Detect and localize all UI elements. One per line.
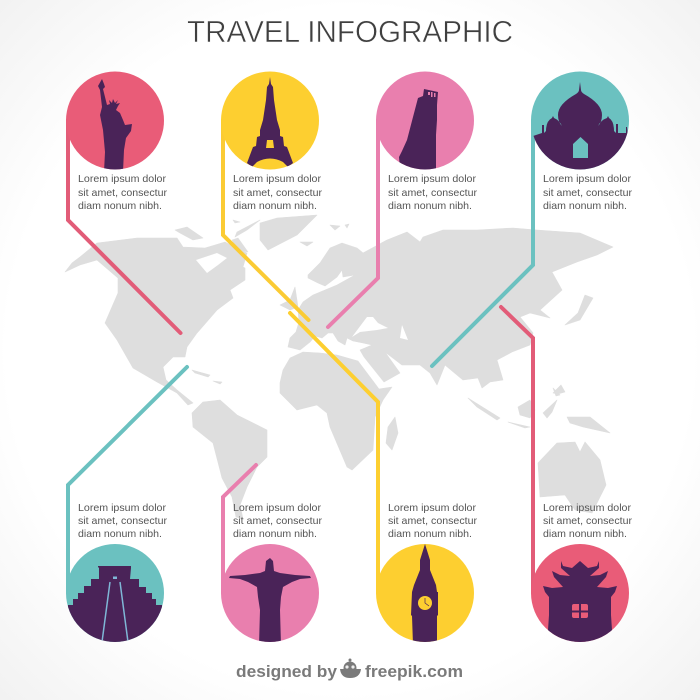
text block: bottom 4: sit amet, consectur (543, 515, 633, 527)
map: inland seas (352, 317, 408, 340)
line: yellow to France (223, 120, 308, 320)
icon: Christ the Redeemer (229, 558, 311, 645)
text block: top 3: sit amet, consectur (388, 187, 478, 199)
map: Southeast Asian islands (468, 385, 565, 428)
text block: top 1 (78, 173, 168, 212)
panel: Leaning Tower of Pisa (376, 72, 474, 170)
text block: top 1: sit amet, consectur (78, 187, 168, 199)
panel: Big Ben (376, 544, 474, 645)
line: teal to Mexico (68, 367, 187, 593)
icon: Eiffel Tower (247, 77, 293, 167)
icon: Taj Mahal (534, 82, 628, 170)
panel: Statue of Liberty (66, 72, 164, 172)
panel: Taj Mahal (531, 72, 629, 170)
icon: Tower of Pisa (399, 89, 438, 170)
map: New Guinea (567, 417, 610, 433)
text block: top 3: Lorem ipsum dolor (388, 173, 477, 185)
world map (65, 215, 613, 519)
footer credit (236, 658, 463, 681)
title: TRAVEL INFOGRAPHIC (187, 15, 513, 49)
panel: Mayan pyramid (66, 544, 164, 650)
map: Arctic islands (175, 220, 260, 252)
text block: bottom 3: Lorem ipsum dolor (388, 502, 477, 514)
text block: bottom 2: sit amet, consectur (233, 515, 323, 527)
text block: bottom 2: diam nonum nibh. (233, 528, 317, 540)
text block: top 4: diam nonum nibh. (543, 200, 627, 212)
text block: top 2: diam nonum nibh. (233, 200, 317, 212)
map: British Isles (280, 287, 298, 310)
text block: bottom 1: sit amet, consectur (78, 515, 168, 527)
text block: top 3 (388, 173, 478, 212)
map: South America (192, 400, 267, 519)
panel: Eiffel Tower (221, 72, 319, 170)
text block: bottom 2: Lorem ipsum dolor (233, 502, 322, 514)
text block: bottom 2 (233, 502, 323, 540)
text block: top 3: diam nonum nibh. (388, 200, 472, 212)
text block: bottom 4: Lorem ipsum dolor (543, 502, 632, 514)
map: Madagascar (386, 417, 398, 450)
map: Australia (538, 442, 606, 513)
text block: bottom 4: diam nonum nibh. (543, 528, 627, 540)
icon: pagoda (543, 561, 617, 650)
map: Africa (280, 352, 392, 470)
text block: top 4: Lorem ipsum dolor (543, 173, 632, 185)
footer credit: designed by (236, 662, 338, 681)
text block: top 2: Lorem ipsum dolor (233, 173, 322, 185)
map: Japan (565, 295, 593, 325)
icon: Statue of Liberty (98, 79, 132, 172)
map: North America (65, 238, 247, 405)
text block: top 4: sit amet, consectur (543, 187, 633, 199)
line: yellow to England (290, 313, 378, 593)
line: red to North America (68, 120, 180, 333)
footer credit: freepik.com (365, 662, 463, 681)
panel: Chinese pagoda (531, 544, 629, 650)
map: Eurasia (288, 228, 613, 388)
map: Iceland and Svalbard (300, 224, 349, 246)
text block: top 1: Lorem ipsum dolor (78, 173, 167, 185)
icon: freepik mascot (340, 658, 361, 678)
text block: top 2 (233, 173, 323, 212)
text block: top 1: diam nonum nibh. (78, 200, 162, 212)
text block: bottom 4 (543, 502, 633, 540)
icon: Big Ben (411, 544, 438, 645)
panel: Christ the Redeemer (221, 544, 319, 645)
line: pink to Brazil (223, 465, 256, 593)
line: teal to India (432, 120, 533, 366)
line: pink to Italy (328, 120, 378, 327)
text block: bottom 1 (78, 502, 168, 540)
map: Hudson Bay (196, 253, 227, 273)
text block: top 2: sit amet, consectur (233, 187, 323, 199)
text block: bottom 3: diam nonum nibh. (388, 528, 472, 540)
text block: bottom 3 (388, 502, 478, 540)
text block: bottom 3: sit amet, consectur (388, 515, 478, 527)
line: red to China (501, 307, 533, 593)
map: Cuba and Caribbean (192, 370, 222, 384)
map: Greenland (260, 215, 317, 250)
icon: Chichen Itza pyramid (68, 566, 162, 650)
route lines (68, 120, 533, 593)
text block: bottom 1: Lorem ipsum dolor (78, 502, 167, 514)
text block: bottom 1: diam nonum nibh. (78, 528, 162, 540)
text block: top 4 (543, 173, 633, 212)
